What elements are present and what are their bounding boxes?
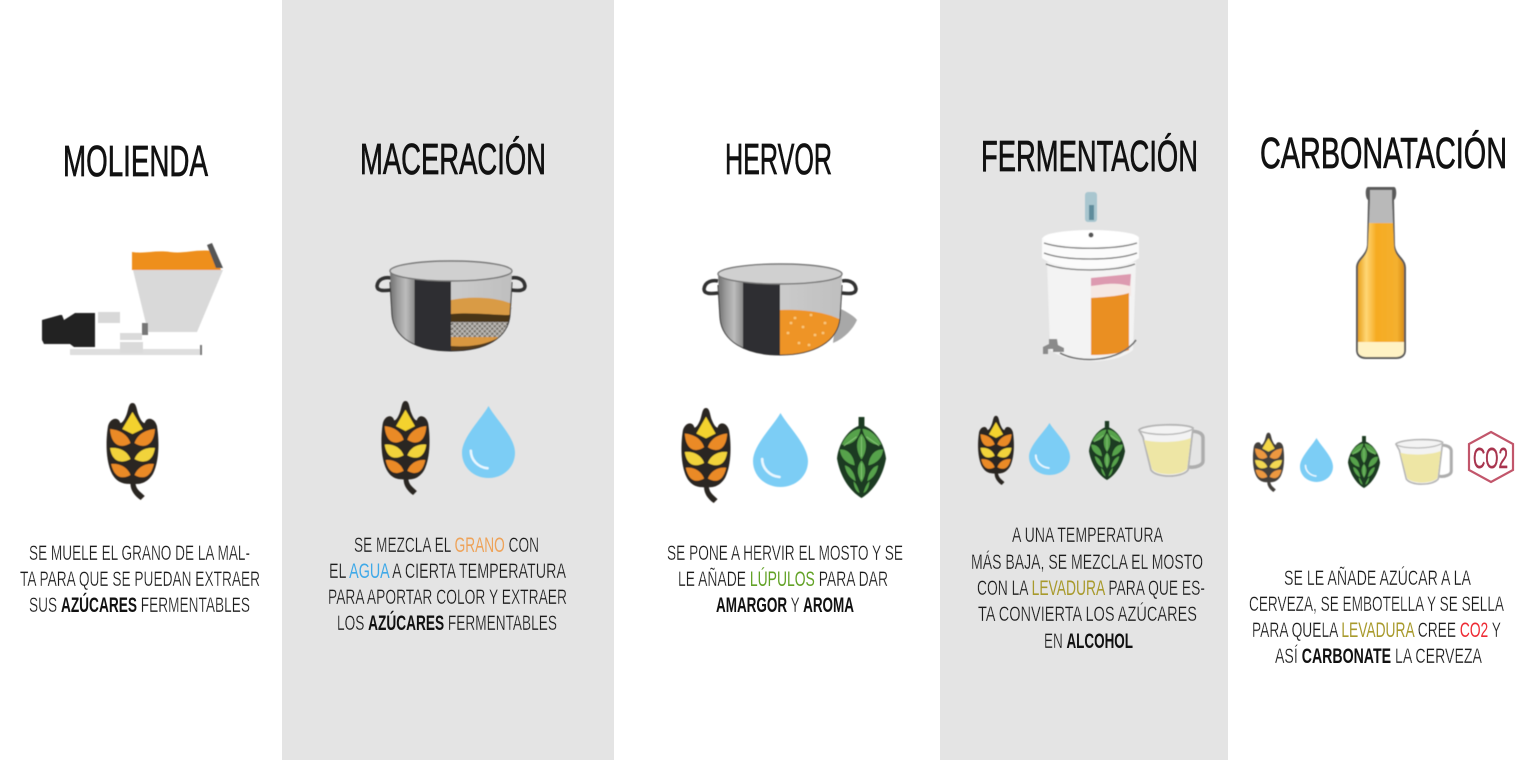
icon: wheat [381, 401, 430, 495]
illustration: mash pot [377, 261, 525, 355]
heading: fermentacion: FERMENTACIÓN [981, 132, 1198, 181]
icon: water drop [1300, 438, 1333, 482]
icon: CO2 hexagon [1469, 432, 1513, 482]
panel: maceracion [328, 135, 567, 635]
illustration: grain mill [42, 243, 223, 355]
text: maceracion description: PARA APORTAR COLOR Y EXTRAER [328, 586, 567, 609]
text: molienda description: SE MUELE EL GRANO DE LA MAL- [29, 542, 250, 565]
icon: wheat [681, 408, 731, 503]
text: maceracion description: SE MEZCLA EL GRANO CON [354, 534, 539, 557]
text: hervor description: SE PONE A HERVIR EL MOSTO Y SE [667, 542, 903, 565]
icon: wheat [1253, 433, 1284, 492]
panel: maceracion background [282, 0, 614, 760]
text: fermentacion description: TA CONVIERTA LOS AZÚCARES [978, 603, 1197, 626]
icon: measuring jug [1139, 425, 1203, 476]
icon: hops [837, 417, 886, 498]
icon: water drop [753, 413, 808, 487]
text: fermentacion description [971, 524, 1205, 653]
text: fermentacion description: CON LA LEVADURA PARA QUE ES- [977, 577, 1205, 600]
text: carbonatacion description: PARA QUELA LEVADURA CREE CO2 Y [1252, 619, 1501, 642]
text: molienda description: TA PARA QUE SE PUEDAN EXTRAER [20, 568, 260, 591]
panel: carbonatacion [1249, 129, 1513, 668]
panel: hervor [667, 135, 903, 617]
heading: hervor: HERVOR [725, 135, 832, 184]
panel: fermentacion background [940, 0, 1228, 760]
text: maceracion description: EL AGUA A CIERTA TEMPERATURA [329, 560, 566, 583]
text: hervor description: AMARGOR Y AROMA [716, 594, 854, 617]
text: carbonatacion description [1249, 566, 1504, 668]
illustration: boiling pot [704, 264, 857, 358]
text: fermentacion description: MÁS BAJA, SE MEZCLA EL MOSTO [971, 551, 1203, 574]
text: fermentacion description: A UNA TEMPERATURA [1012, 524, 1163, 547]
icon: water drop [462, 406, 515, 478]
text: maceracion description [328, 534, 567, 635]
icon: hops [1348, 436, 1380, 488]
illustration: fermenter bucket [1042, 192, 1139, 361]
text: maceracion description: LOS AZÚCARES FERMENTABLES [337, 611, 557, 635]
panel: fermentacion [971, 132, 1205, 653]
text: carbonatacion description: ASÍ CARBONATE LA CERVEZA [1275, 645, 1482, 668]
text: fermentacion description: EN ALCOHOL [1044, 630, 1133, 653]
heading: molienda: MOLIENDA [63, 137, 208, 186]
icon: water drop [1029, 423, 1070, 475]
illustration: beer bottle [1356, 187, 1406, 359]
text: molienda description [20, 542, 260, 617]
text: molienda description: SUS AZÚCARES FERMENTABLES [29, 593, 250, 617]
icon: measuring jug [1396, 440, 1451, 484]
text: hervor description [667, 542, 903, 617]
icon: wheat [107, 403, 158, 500]
panel: molienda [20, 137, 260, 617]
text: hervor description: LE AÑADE LÚPULOS PARA DAR [678, 567, 888, 591]
icon: wheat [978, 416, 1014, 485]
heading: maceracion: MACERACIÓN [360, 135, 546, 184]
icon: hops [1089, 421, 1125, 480]
